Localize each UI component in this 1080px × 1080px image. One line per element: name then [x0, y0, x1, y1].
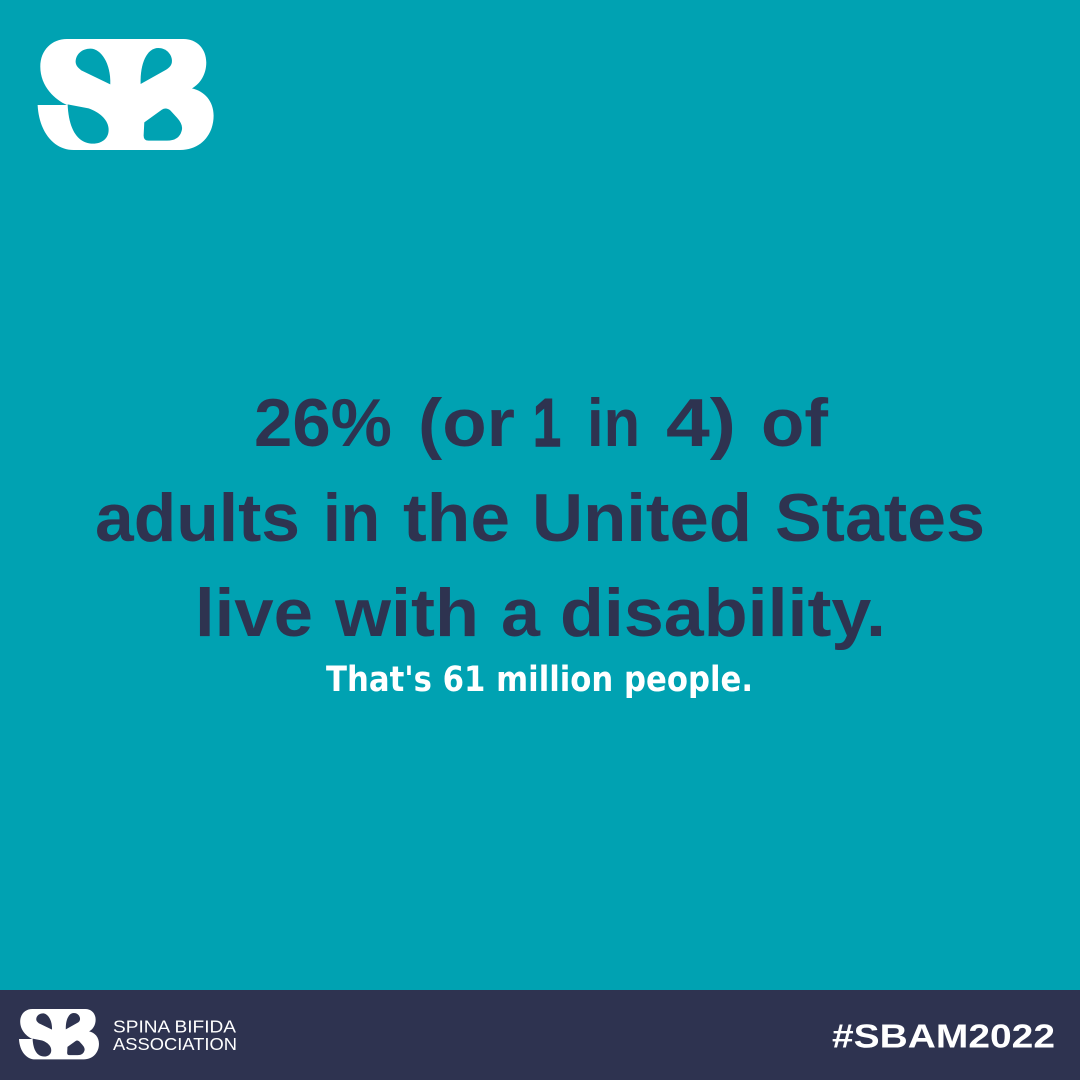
footer logo mark: [19, 1009, 99, 1059]
headline: a: [501, 575, 541, 651]
headline: with: [334, 575, 479, 651]
headline: 26%: [254, 385, 392, 461]
headline: 4): [666, 385, 736, 461]
footer organisation name: [113, 1016, 237, 1054]
headline: [95, 385, 985, 651]
headline: United: [532, 480, 752, 556]
headline: States: [775, 480, 985, 556]
logo: SB mark top left: [38, 39, 214, 150]
headline: in: [587, 385, 640, 461]
footer bar: [0, 990, 1080, 1080]
footer organisation name: SPINA BIFIDA: [113, 1016, 236, 1036]
headline: in: [323, 480, 380, 556]
subheading: That's 61 million people.: [326, 660, 753, 700]
headline: disability.: [560, 575, 886, 651]
headline: the: [403, 480, 510, 556]
headline: (or: [418, 385, 515, 461]
headline: 1: [533, 385, 561, 461]
headline: of: [761, 385, 828, 461]
footer hashtag: #SBAM2022: [832, 1018, 1055, 1056]
footer organisation name: ASSOCIATION: [113, 1034, 237, 1054]
headline: adults: [95, 480, 300, 556]
headline: live: [195, 575, 313, 651]
